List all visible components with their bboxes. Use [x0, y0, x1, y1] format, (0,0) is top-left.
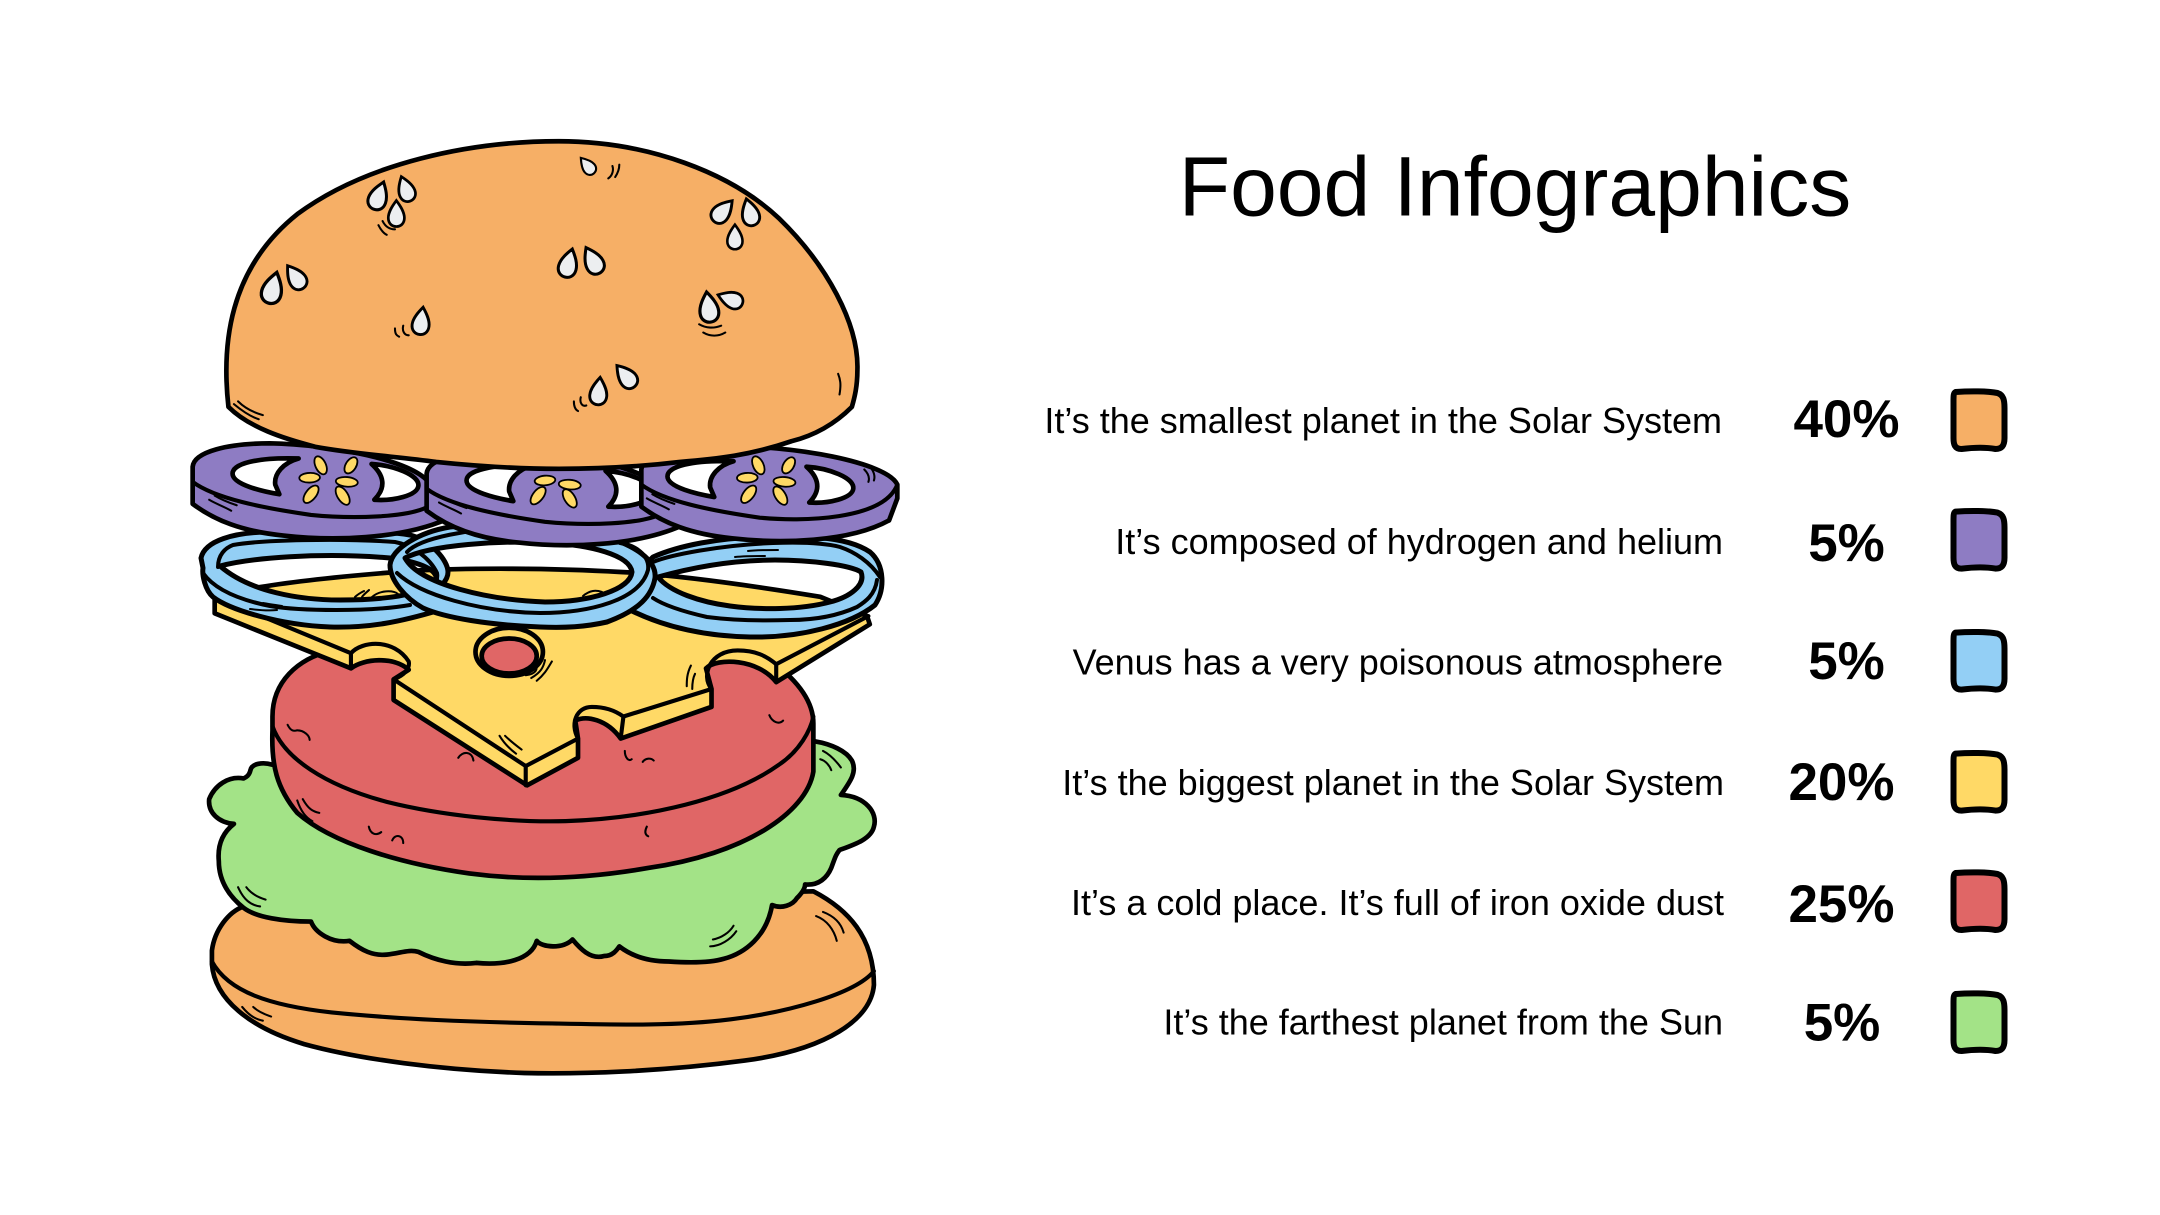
onion ring centre — [390, 524, 655, 627]
legend row 6: It’s the farthest planet from the Sun — [1163, 1002, 1723, 1042]
swatch yellow — [1954, 753, 2004, 811]
legend row 1: It’s the smallest planet in the Solar System — [1044, 400, 1722, 441]
onion ring left — [201, 531, 448, 627]
legend row 3: 5% — [1808, 632, 1885, 691]
swatch red — [1954, 872, 2004, 930]
legend row 5: 25% — [1788, 875, 1895, 934]
lettuce — [209, 741, 875, 964]
upper layers — [193, 141, 897, 545]
legend row 4 — [1062, 753, 2004, 812]
legend row 6 — [1163, 993, 2004, 1052]
illustration: burger — [193, 141, 897, 1073]
title: Food Infographics — [1179, 140, 1851, 234]
tomato slice right — [641, 446, 897, 541]
legend row 4: It’s the biggest planet in the Solar System — [1062, 762, 1724, 803]
legend row 3: Venus has a very poisonous atmosphere — [1073, 642, 1723, 682]
legend row 2: It’s composed of hydrogen and helium — [1115, 521, 1723, 562]
legend row 2 — [1115, 511, 2004, 573]
swatch green — [1954, 993, 2004, 1051]
cheese hole — [475, 628, 543, 676]
swatch blue — [1954, 632, 2004, 690]
legend row 5: It’s a cold place. It’s full of iron oxide dust — [1071, 882, 1724, 923]
sesame seeds — [259, 154, 762, 406]
lower layers — [209, 569, 875, 1073]
legend row 3 — [1073, 632, 2004, 691]
patty — [272, 650, 813, 878]
legend row 6: 5% — [1804, 994, 1880, 1052]
legend row 1: 40% — [1793, 390, 1900, 449]
legend row 1 — [1044, 390, 2004, 449]
bottom bun — [212, 891, 874, 1073]
top bun — [226, 141, 857, 469]
legend row 5 — [1071, 872, 2004, 934]
legend row 2: 5% — [1808, 514, 1885, 573]
tomato slice left — [193, 443, 447, 538]
legend row 4: 20% — [1788, 753, 1895, 812]
cheese — [215, 569, 870, 785]
swatch purple — [1954, 511, 2004, 569]
swatch orange — [1954, 391, 2004, 449]
onion ring right — [630, 537, 882, 637]
tomato slice centre — [427, 450, 681, 545]
